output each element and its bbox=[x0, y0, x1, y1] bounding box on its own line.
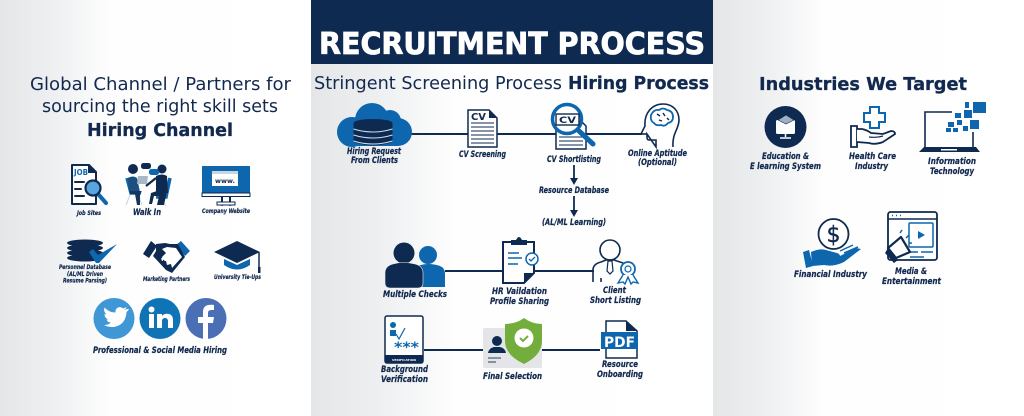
title banner bbox=[311, 0, 713, 64]
connector lines bbox=[410, 134, 642, 350]
resource onboarding: Onboarding bbox=[597, 370, 643, 380]
personnel database: Resume Parsing) bbox=[63, 276, 107, 284]
financial industry: Financial Industry bbox=[794, 270, 867, 280]
hiring request: Hiring Request bbox=[347, 147, 402, 157]
professional and social media hiring: Professional & Social Media Hiring bbox=[93, 346, 227, 356]
final selection: Final Selection bbox=[483, 372, 542, 382]
icon: twitter bbox=[94, 298, 134, 339]
personnel database: (AL/ML Driven bbox=[67, 270, 103, 278]
personnel database: Personnel Database bbox=[59, 263, 111, 271]
information technology bbox=[919, 102, 986, 177]
health care: Health Care bbox=[849, 152, 896, 162]
university tie-ups: University Tie-Ups bbox=[214, 273, 261, 281]
heading: hiring channel: Hiring Channel bbox=[87, 120, 233, 141]
professional and social media hiring bbox=[93, 298, 227, 356]
company website: Company Website bbox=[202, 207, 250, 215]
information technology: Information bbox=[928, 157, 976, 167]
heading: hiring channel bbox=[30, 74, 292, 141]
panel: industries bbox=[713, 0, 1024, 416]
background verification bbox=[381, 316, 428, 385]
resource onboarding bbox=[597, 321, 643, 380]
health care: Industry bbox=[855, 162, 888, 172]
online aptitude bbox=[628, 104, 687, 168]
cv screening: CV bbox=[471, 112, 486, 123]
job sites bbox=[72, 164, 106, 217]
background verification: *** bbox=[394, 340, 420, 356]
information technology: Technology bbox=[930, 167, 974, 177]
resource onboarding: PDF bbox=[604, 335, 635, 351]
client short listing: Short Listing bbox=[590, 296, 641, 306]
cv screening: CV Screening bbox=[459, 150, 506, 160]
heading: industries we target: Industries We Target bbox=[759, 74, 967, 95]
job sites: JOB bbox=[73, 168, 88, 177]
marketing partners: Marketing Partners bbox=[143, 275, 190, 283]
client short listing bbox=[590, 240, 641, 306]
final selection bbox=[483, 318, 542, 382]
resource onboarding: Resource bbox=[602, 360, 638, 370]
media and entertainment bbox=[882, 212, 942, 287]
client short listing: Client bbox=[603, 286, 627, 296]
heading: hiring process: Hiring Process bbox=[568, 73, 709, 94]
arrow: to ai/ml learning bbox=[570, 196, 578, 217]
company website: www. bbox=[215, 177, 235, 185]
education: E learning System bbox=[750, 162, 821, 172]
hr validation: HR Vaildation bbox=[492, 287, 547, 297]
health care bbox=[849, 107, 896, 172]
media and entertainment: Media & bbox=[895, 267, 927, 277]
university tie-ups bbox=[214, 241, 261, 281]
education: Education & bbox=[762, 152, 809, 162]
icon: facebook bbox=[186, 298, 226, 339]
financial industry: $ bbox=[826, 223, 840, 248]
title banner: RECRUITMENT PROCESS bbox=[319, 27, 705, 62]
hiring request bbox=[337, 103, 412, 166]
resource database label: Resource Database bbox=[539, 186, 609, 196]
panel: hiring channel bbox=[0, 0, 311, 416]
marketing partners bbox=[143, 241, 190, 283]
multiple checks bbox=[383, 242, 448, 300]
hr validation: Profile Sharing bbox=[490, 297, 549, 307]
media and entertainment: Entertainment bbox=[882, 277, 942, 287]
personnel database bbox=[59, 240, 117, 284]
cv shortlisting: CV Shortlisting bbox=[547, 155, 601, 165]
online aptitude: (Optional) bbox=[638, 158, 677, 168]
company website bbox=[202, 166, 250, 215]
cv shortlisting bbox=[547, 104, 601, 165]
background verification: VERIFICATION bbox=[392, 358, 417, 362]
ai/ml learning label: (AL/ML Learning) bbox=[542, 218, 606, 228]
heading: hiring process bbox=[314, 73, 709, 94]
walk in bbox=[126, 163, 170, 218]
background verification: Verification bbox=[381, 375, 428, 385]
online aptitude: Online Aptitude bbox=[628, 149, 687, 159]
cv shortlisting: CV bbox=[559, 116, 576, 126]
financial industry bbox=[794, 219, 867, 280]
heading: hiring channel: sourcing the right skill sets bbox=[42, 96, 278, 117]
education bbox=[750, 106, 821, 172]
multiple checks: Multiple Checks bbox=[383, 290, 448, 300]
job sites: Job Sites bbox=[76, 209, 101, 217]
heading: hiring channel: Global Channel / Partners for bbox=[30, 74, 292, 95]
heading: hiring process: Stringent Screening Process bbox=[314, 73, 562, 94]
hiring request: From Clients bbox=[351, 156, 398, 166]
arrow: to resource database bbox=[570, 165, 578, 185]
icon: linkedin bbox=[140, 298, 180, 339]
panel: recruitment process bbox=[311, 0, 713, 416]
background verification: Background bbox=[381, 365, 428, 375]
cv screening bbox=[459, 110, 506, 160]
hr validation bbox=[490, 237, 549, 307]
walk in: Walk In bbox=[133, 208, 161, 218]
